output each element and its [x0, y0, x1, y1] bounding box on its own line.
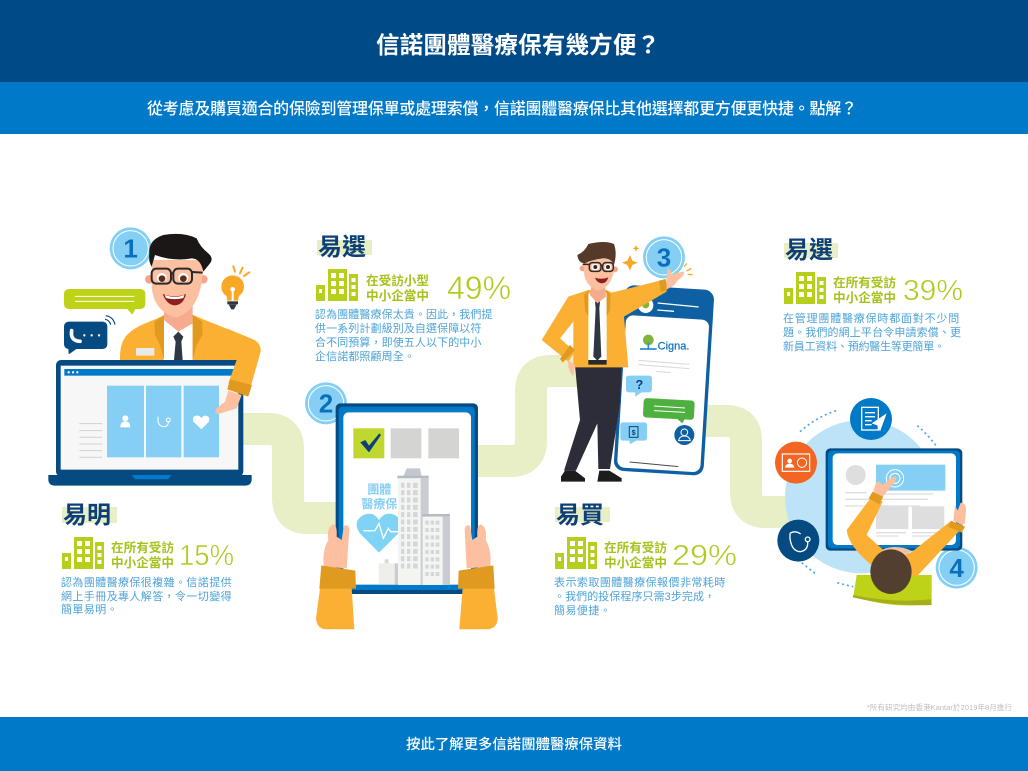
- footnote: *所有研究均由香港Kantar於2019年8月進行: [867, 702, 1012, 712]
- heading: 易選: [785, 237, 833, 264]
- icon: stethoscope: [777, 520, 819, 562]
- description: 網上手冊及專人解答，令一切變得: [61, 589, 232, 603]
- shopping bubble: [620, 422, 647, 444]
- icon: building: [62, 537, 104, 569]
- stat value: 29%: [672, 540, 737, 572]
- badge 3: [643, 236, 685, 278]
- phone: [613, 285, 715, 476]
- tablet label: [361, 481, 397, 511]
- tablet label: 醫療保: [361, 496, 397, 511]
- man arm pointing: [215, 328, 261, 414]
- description: 。我們的投保程序只需3步完成，: [554, 589, 715, 603]
- description: 合不同預算，即使五人以下的中小: [315, 335, 482, 349]
- icon: green speech bubble: [64, 289, 145, 315]
- icon: building: [316, 269, 358, 301]
- Cigna logo: Cigna.: [658, 340, 689, 352]
- text block: 易明 15%: [61, 502, 234, 616]
- icon: building: [555, 537, 597, 569]
- icon: heart: [357, 514, 402, 553]
- man head: [577, 242, 618, 303]
- stat label: 在所有受訪: [111, 540, 174, 555]
- Cigna logo: [640, 335, 689, 352]
- illustration 4: user tapping tablet: [775, 398, 978, 606]
- stat value: 49%: [447, 270, 511, 306]
- text block: 易選 49%: [315, 234, 511, 363]
- tablet: [826, 448, 962, 551]
- left hand and sleeve: [316, 524, 356, 629]
- description: 表示索取團體醫療保報價非常耗時: [554, 575, 726, 589]
- icon: phone bubble: [64, 316, 115, 354]
- description: 供一系列計劃級別及自選保障以符: [315, 321, 482, 335]
- illustration 1: man with laptop: [48, 227, 261, 486]
- tablet label: 團體: [367, 481, 391, 496]
- description: 簡易便捷。: [554, 603, 611, 617]
- badge 1: 1: [123, 234, 138, 264]
- question bubble: [626, 376, 652, 397]
- user icon: [674, 425, 694, 445]
- badge 3: 3: [657, 243, 671, 273]
- stat label: 中小企當中: [604, 555, 667, 570]
- stat label: [604, 540, 667, 570]
- man trousers and shoes: [561, 365, 622, 482]
- description: 題。我們的網上平台令申請索償、更: [783, 325, 961, 339]
- badge 1: [110, 227, 152, 269]
- man jacket and arms: [542, 268, 684, 377]
- header: title band: 信諾團體醫療保有幾方便？: [376, 31, 660, 58]
- header: subtitle band: 從考慮及購買適合的保險到管理保單或處理索償，信諾團體醫療保比其他選擇都更方便更快捷。點解？: [147, 99, 857, 118]
- icon: light bulb: [221, 266, 249, 309]
- description: 簡單易明。: [61, 602, 118, 616]
- stat label: [111, 540, 174, 570]
- person from above: [847, 477, 966, 606]
- badge 2: [305, 382, 347, 424]
- footer band: 按此了解更多信諾團體醫療保資料: [406, 735, 622, 753]
- description: [783, 311, 961, 353]
- description: 在管理團體醫療保時都面對不少問: [783, 311, 960, 325]
- heading: 易選: [318, 234, 366, 261]
- text block: 易買 29%: [554, 502, 737, 617]
- stat label: [833, 275, 896, 305]
- badge 4: [936, 547, 978, 589]
- heading: 易明: [63, 502, 111, 529]
- description: 企信諾都照顧周全。: [315, 349, 415, 363]
- stat label: [366, 273, 429, 303]
- icon: document send: [850, 398, 892, 440]
- text block: 易選 39%: [783, 237, 963, 353]
- right hand and sleeve: [458, 524, 498, 629]
- badge 4: 4: [949, 553, 964, 583]
- question bubble: ?: [635, 378, 643, 392]
- tablet: [336, 403, 478, 594]
- description: 認為團體醫療保很複雜。信諾提供: [61, 575, 232, 589]
- stat label: 中小企當中: [111, 555, 174, 570]
- badge 2: 2: [319, 389, 333, 419]
- description: [61, 575, 232, 616]
- description: 新員工資料、預約醫生等更簡單。: [783, 339, 945, 353]
- connecting green path: [235, 371, 800, 518]
- stat value: 15%: [179, 540, 234, 572]
- laptop: [48, 360, 252, 486]
- man head: [145, 234, 212, 317]
- heading: 易買: [556, 502, 604, 529]
- green chat bubble: [643, 398, 695, 423]
- stat label: 在所有受訪: [833, 275, 896, 290]
- stat label: 中小企當中: [366, 288, 429, 303]
- illustration 2: hands holding tablet: [305, 382, 498, 629]
- description: [554, 575, 726, 617]
- background circle: [785, 420, 938, 573]
- stat label: 在所有受訪: [604, 540, 667, 555]
- illustration 3: man with phone: [542, 236, 715, 482]
- icon: id card refresh: [775, 442, 817, 484]
- stat value: 39%: [903, 275, 963, 307]
- dotted arcs: [800, 411, 937, 587]
- selected checkbox: [353, 428, 384, 458]
- header: subtitle band: [0, 82, 1028, 134]
- stat label: 中小企當中: [833, 290, 896, 305]
- icon: building: [784, 272, 826, 304]
- stat label: 在受訪小型: [366, 273, 429, 288]
- description: [315, 307, 493, 363]
- sparkles: [622, 245, 693, 275]
- man torso: [120, 303, 248, 362]
- footer band: [0, 717, 1028, 771]
- header: title band: [0, 0, 1028, 82]
- buildings: [379, 468, 450, 585]
- shopping bubble: $: [632, 428, 636, 437]
- description: 認為團體醫療保太貴。因此，我們提: [315, 307, 493, 321]
